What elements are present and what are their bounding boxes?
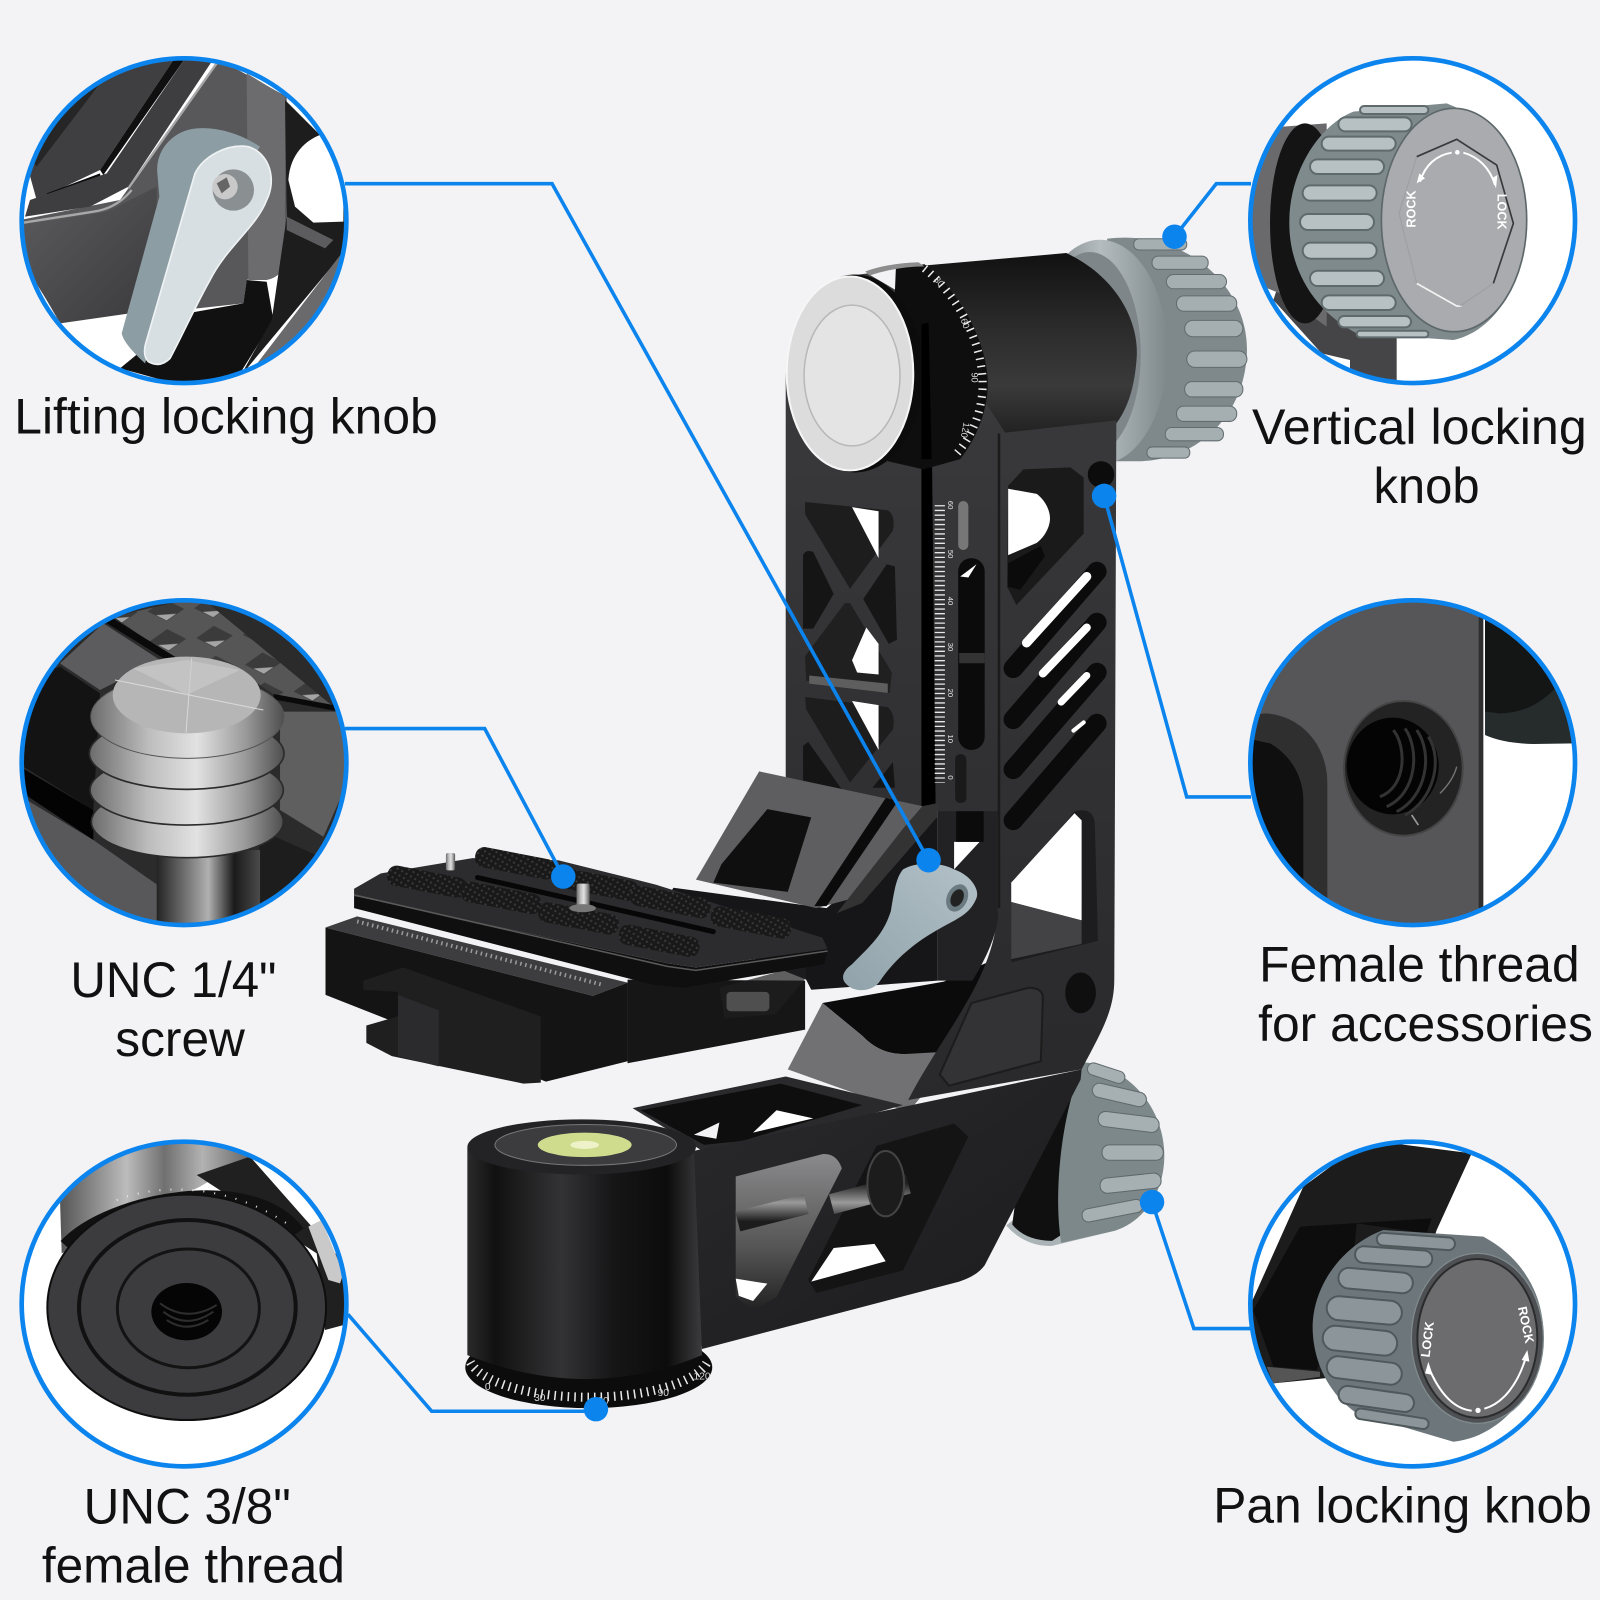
base degree dial [470, 1362, 711, 1407]
base degree dial: 30 [534, 1393, 546, 1404]
vertical millimetre scale: 30 [946, 643, 955, 651]
knob face [1381, 108, 1527, 332]
label: UNC 1/4 screw [70, 952, 277, 1067]
right upper window [1007, 467, 1084, 605]
quick release clamp base [326, 916, 806, 1084]
quick release plate [354, 845, 828, 988]
threaded hole [151, 1283, 222, 1340]
label: lifting locking knob: Lifting locking knob [14, 389, 438, 445]
anti-slip pads [386, 845, 793, 959]
label: vertical locking knob [1252, 399, 1587, 514]
knurl ridges [1300, 106, 1428, 337]
leader line: lifting locking knob [345, 184, 941, 872]
top dial ring and cap: 30 [932, 275, 946, 289]
top horizontal cylinder [898, 253, 1137, 474]
knob face lettering [1405, 190, 1508, 230]
base disc [47, 1195, 326, 1420]
vertical millimetre scale: 40 [946, 597, 955, 605]
knob body [1289, 103, 1502, 340]
lower arm [633, 1069, 1082, 1349]
top dial ring and cap: 90 [969, 372, 979, 383]
arm window right [808, 1123, 968, 1293]
panel: pan locking knob close-up [1248, 1139, 1578, 1469]
horizontal spindle rod [738, 1184, 908, 1221]
threaded hole [1344, 701, 1463, 836]
bubble level [538, 1133, 632, 1157]
screw stem [157, 850, 260, 927]
leader line: UNC 1/4 screw [345, 729, 576, 889]
label: UNC 3/8 female thread [42, 1478, 345, 1594]
knob face lettering: ROCK [1515, 1305, 1537, 1345]
pan locking knob on product [1006, 1061, 1164, 1246]
label: female thread for accessories: for accessories [1258, 996, 1593, 1052]
central rail lower section [938, 811, 998, 981]
tension screw [727, 992, 769, 1011]
upper bracket [653, 771, 938, 990]
right lower window [1011, 810, 1098, 962]
base degree dial: 120 [694, 1372, 711, 1383]
panel: female thread close-up [1248, 598, 1578, 928]
leader line: female thread [1092, 484, 1251, 797]
lifting locking lever on product [843, 864, 977, 990]
diagonal slots [1013, 571, 1097, 820]
locating pin [446, 853, 455, 870]
label: vertical locking knob: knob [1373, 458, 1480, 514]
knob face lettering [1419, 1305, 1537, 1358]
lower accessory thread hole [1065, 972, 1096, 1013]
base cylinder with level [465, 1119, 712, 1408]
left truss cutouts [803, 502, 897, 791]
leader line: vertical locking knob [1162, 184, 1251, 249]
lever side and face [122, 128, 271, 364]
vertical millimetre scale: 50 [946, 550, 955, 558]
vertical locking knob on product [1033, 238, 1247, 464]
vertical millimetre scale: 60 [946, 501, 955, 509]
accessory thread hole upper [1088, 461, 1114, 488]
panel: vertical locking knob close-up [1248, 56, 1578, 386]
central gusset: grey slope and recess [788, 959, 995, 1112]
arm plate detail lines and scale groove [921, 324, 999, 908]
label: female thread for accessories: Female thread [1259, 937, 1580, 993]
panel: UNC 3/8 inch female thread close-up [19, 1139, 349, 1469]
top dial ring and cap: 120 [959, 422, 971, 439]
panel: lifting locking knob close-up [19, 56, 349, 386]
vertical millimetre scale: 20 [946, 689, 955, 697]
vertical millimetre scale [940, 501, 955, 783]
label: UNC 3/8 female thread: UNC 3/8" [84, 1478, 291, 1534]
screw head [90, 688, 284, 759]
screw thread rings [88, 736, 285, 858]
clamp lever [363, 967, 541, 1084]
label: UNC 3/8 female thread: female thread [42, 1538, 345, 1594]
label: female thread for accessories [1258, 937, 1593, 1052]
label: UNC 1/4 screw: screw [115, 1011, 246, 1067]
vertical arm plate [786, 273, 1116, 1100]
leader line: UNC 3/8 female thread [348, 1314, 608, 1421]
recessed panel [940, 988, 1043, 1086]
vertical millimetre scale: 0 [946, 775, 955, 780]
left recess [1254, 713, 1328, 898]
top dial ring and cap: 60 [959, 317, 972, 330]
label: UNC 1/4 screw: UNC 1/4" [70, 952, 277, 1008]
knob face lettering: LOCK [1419, 1320, 1437, 1358]
label: pan locking knob: Pan locking knob [1213, 1477, 1592, 1533]
knob body [1313, 1230, 1543, 1442]
knob face lettering: ROCK [1405, 190, 1419, 228]
knob face [1411, 1253, 1543, 1423]
panel: UNC 1/4 inch screw close-up [19, 598, 349, 928]
knob face lettering: LOCK [1494, 194, 1508, 230]
1/4 inch screw on plate [569, 884, 596, 912]
knurl ridges [1322, 1232, 1455, 1430]
arm window left [736, 1154, 842, 1310]
base degree dial: 0 [485, 1382, 491, 1393]
top dial ring and cap [787, 262, 988, 472]
base degree dial: 90 [658, 1388, 669, 1399]
base degree dial: 60 [597, 1396, 609, 1407]
label: vertical locking knob: Vertical locking [1252, 399, 1587, 455]
vertical millimetre scale: 10 [946, 735, 955, 743]
main product: gimbal head [326, 238, 1247, 1408]
leader line: pan locking knob [1140, 1190, 1251, 1329]
